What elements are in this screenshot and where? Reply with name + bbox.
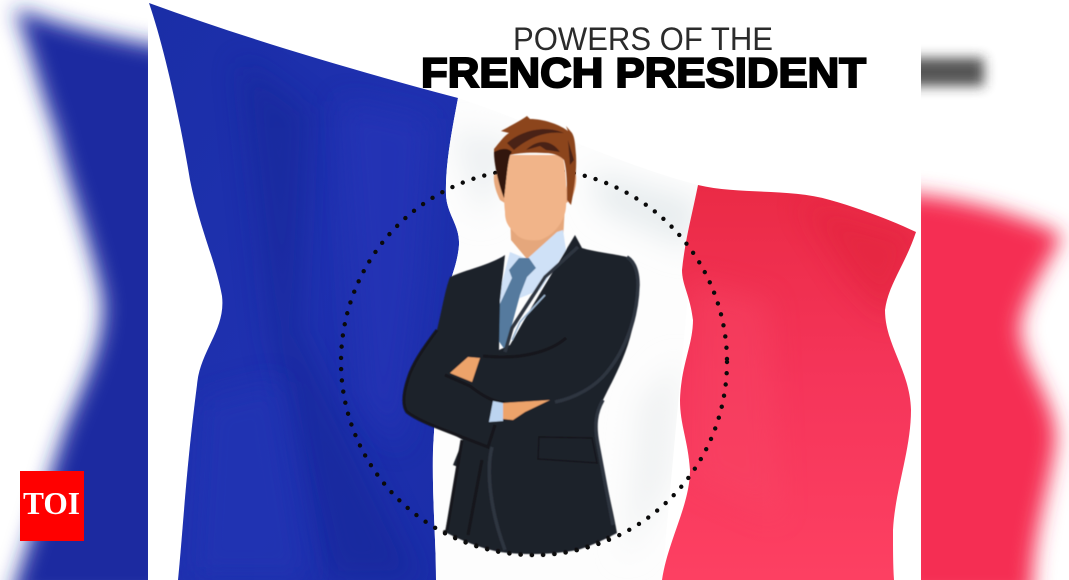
blurred background: left side: [0, 0, 148, 580]
central image panel: [148, 0, 921, 580]
hair: [494, 116, 576, 205]
folded arm lines: [404, 330, 566, 535]
flag: white stripe: [430, 90, 710, 580]
flag: red stripe: [655, 180, 925, 580]
bottom jacket dots: [445, 532, 617, 555]
face: [504, 155, 566, 240]
shirt cuff: [489, 401, 503, 422]
title line 2: FRENCH PRESIDENT: [421, 49, 866, 96]
right hand: [503, 400, 550, 420]
left hand: [450, 357, 480, 382]
TOI logo: TOI: [23, 485, 80, 521]
jacket lapel highlights: [489, 247, 638, 550]
title: [421, 21, 866, 96]
shirt collar: [500, 230, 566, 306]
title line 1: POWERS OF THE: [513, 21, 773, 57]
flag: blue stripe: [140, 0, 470, 580]
blurred background: right side: [921, 48, 1069, 580]
necktie: [498, 258, 536, 350]
dotted circle: [341, 169, 727, 555]
TOI logo: [20, 471, 84, 541]
president figure: [404, 116, 638, 555]
ears and neck: [494, 174, 576, 205]
jacket pocket: [538, 437, 597, 463]
suit jacket: [404, 235, 638, 554]
